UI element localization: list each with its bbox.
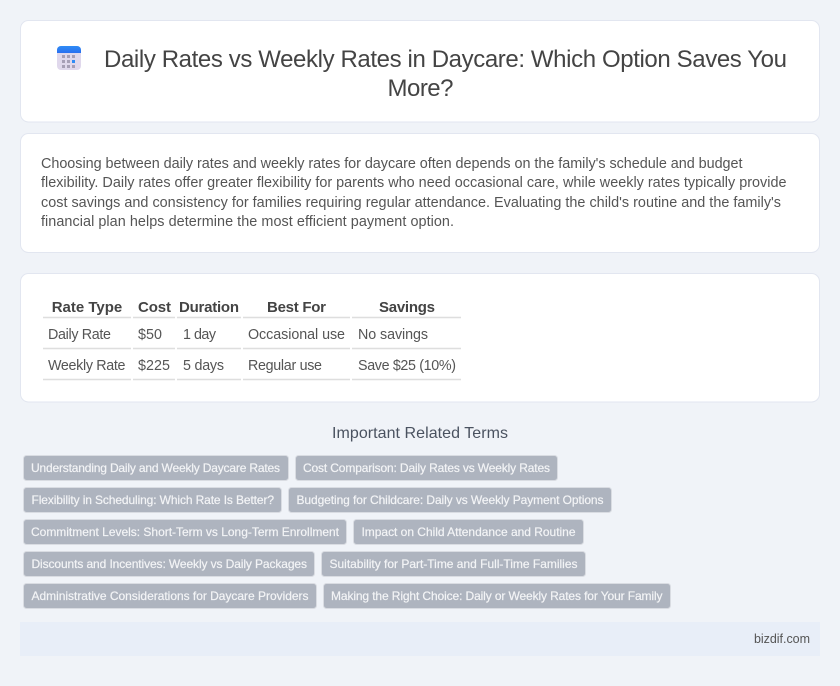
table header row: Best For (267, 299, 326, 316)
tag: commitment levels: Commitment Levels: Short-Term vs Long-Term Enrollment (31, 525, 340, 539)
panel: rate comparison table (20, 274, 820, 402)
panel: title header (20, 20, 820, 122)
tag: budgeting: Budgeting for Childcare: Daily vs Weekly Payment Options (296, 493, 604, 507)
text block: description paragraph: flexibility. Daily rates offer greater flexibility for parents who need occasional care, while weekly rates typically provide (41, 175, 786, 191)
tag: understanding rates (24, 456, 288, 480)
tag: making the right choice: Making the Right Choice: Daily or Weekly Rates for Your Family (331, 589, 662, 603)
table header row: Savings (379, 299, 435, 316)
tag: suitability (322, 552, 586, 576)
tag: budgeting (288, 488, 612, 512)
tag: commitment levels (24, 520, 346, 544)
table header row: Cost (138, 299, 171, 316)
table row: weekly rate: 5 days (183, 358, 224, 374)
title: More? (388, 75, 454, 102)
tag: making the right choice (324, 584, 670, 608)
text block: description paragraph (41, 156, 786, 230)
table row: weekly rate: Weekly Rate (48, 358, 126, 374)
tag: understanding rates: Understanding Daily and Weekly Daycare Rates (31, 461, 280, 475)
table header row: Rate Type (52, 299, 122, 316)
table row: daily rate (48, 327, 428, 343)
tag: impact on attendance: Impact on Child Attendance and Routine (362, 525, 576, 539)
title: Daily Rates vs Weekly Rates in Daycare: Which Option Saves You (104, 46, 787, 73)
tag: administrative considerations: Administrative Considerations for Daycare Providers (32, 589, 308, 603)
table row: daily rate: Occasional use (248, 327, 345, 343)
text block: description paragraph: cost savings and consistency for families requiring regular attendance. Evaluating the child's routine and the family's (41, 195, 781, 211)
table row: daily rate: $50 (138, 327, 162, 343)
tag list: related terms (24, 456, 670, 608)
icon: calendar (57, 46, 81, 70)
table row: daily rate: No savings (358, 327, 428, 343)
table header row (52, 299, 435, 316)
tag: administrative considerations (24, 584, 316, 608)
panel: description (20, 134, 820, 252)
text block: description paragraph: financial plan helps determine the most efficient payment option. (41, 214, 454, 230)
table header row: Duration (179, 299, 239, 316)
tag: suitability: Suitability for Part-Time and Full-Time Families (330, 557, 578, 571)
tag: impact on attendance (354, 520, 584, 544)
tag: cost comparison (296, 456, 558, 480)
text block: description paragraph: Choosing between daily rates and weekly rates for daycare often depends on the family's schedule and budget (41, 156, 742, 172)
tag: discounts: Discounts and Incentives: Weekly vs Daily Packages (32, 557, 307, 571)
table row: weekly rate: Save $25 (10%) (358, 358, 456, 374)
heading: important related terms: Important Related Terms (332, 425, 508, 442)
tag: cost comparison: Cost Comparison: Daily Rates vs Weekly Rates (303, 461, 550, 475)
title (104, 46, 787, 102)
tag: discounts (24, 552, 314, 576)
table row: weekly rate: Regular use (248, 358, 322, 374)
table row: daily rate: 1 day (183, 327, 217, 343)
tag: flexibility: Flexibility in Scheduling: Which Rate Is Better? (32, 493, 274, 507)
table row: weekly rate (48, 358, 456, 374)
footer: bizdif.com (754, 632, 810, 646)
table row: weekly rate: $225 (138, 358, 170, 374)
footer (20, 622, 820, 656)
table row: daily rate: Daily Rate (48, 327, 111, 343)
tag: flexibility (24, 488, 282, 512)
